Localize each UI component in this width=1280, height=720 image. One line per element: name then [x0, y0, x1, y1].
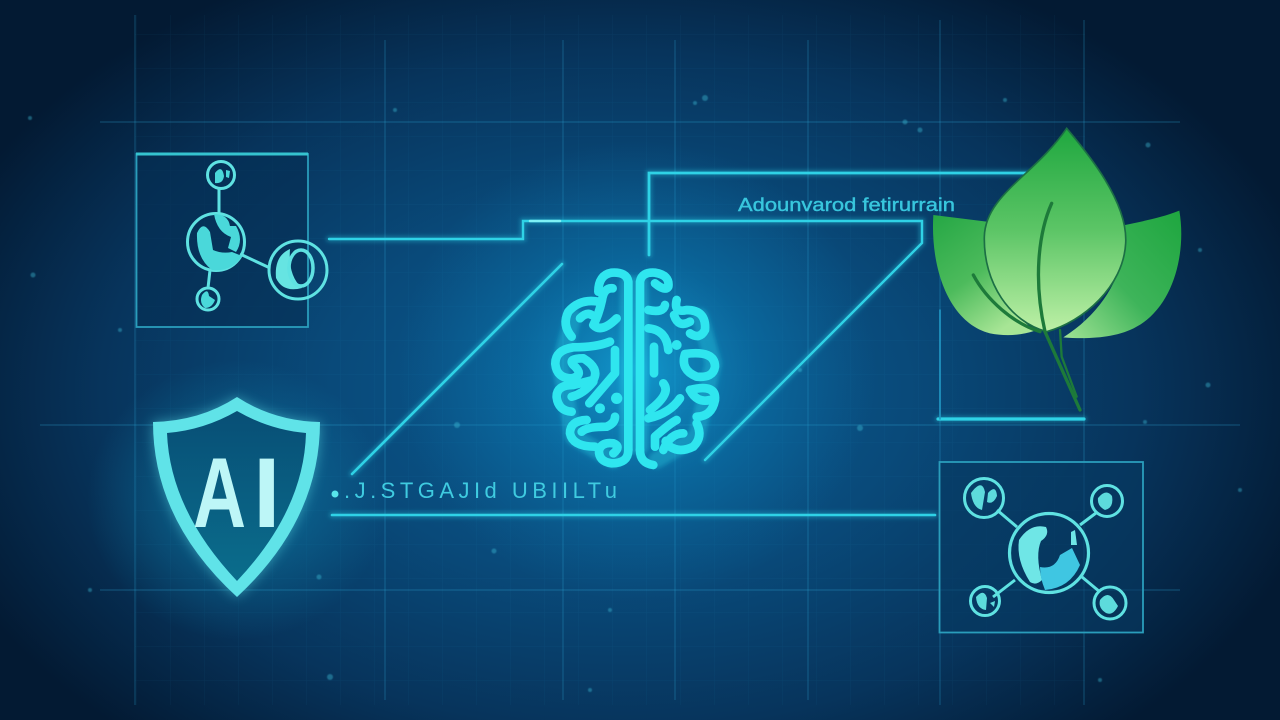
- icon: network molecule: [964, 478, 1126, 619]
- panel: molecule: [136, 154, 327, 327]
- icon: green leaf: [933, 128, 1181, 410]
- label: AI: I: [253, 437, 281, 548]
- panel: network molecule: [940, 462, 1143, 632]
- caption: upper connector text: Adounvarod fetirurrain: [738, 195, 955, 215]
- connector lines: [329, 173, 1084, 515]
- icon: glowing brain: [555, 273, 715, 465]
- panel: AI shield: [153, 397, 320, 597]
- label: AI: A: [193, 437, 246, 548]
- icon: molecule: [188, 162, 327, 310]
- caption: lower connector text: .J.STGAJId UBIILTu: [344, 478, 617, 503]
